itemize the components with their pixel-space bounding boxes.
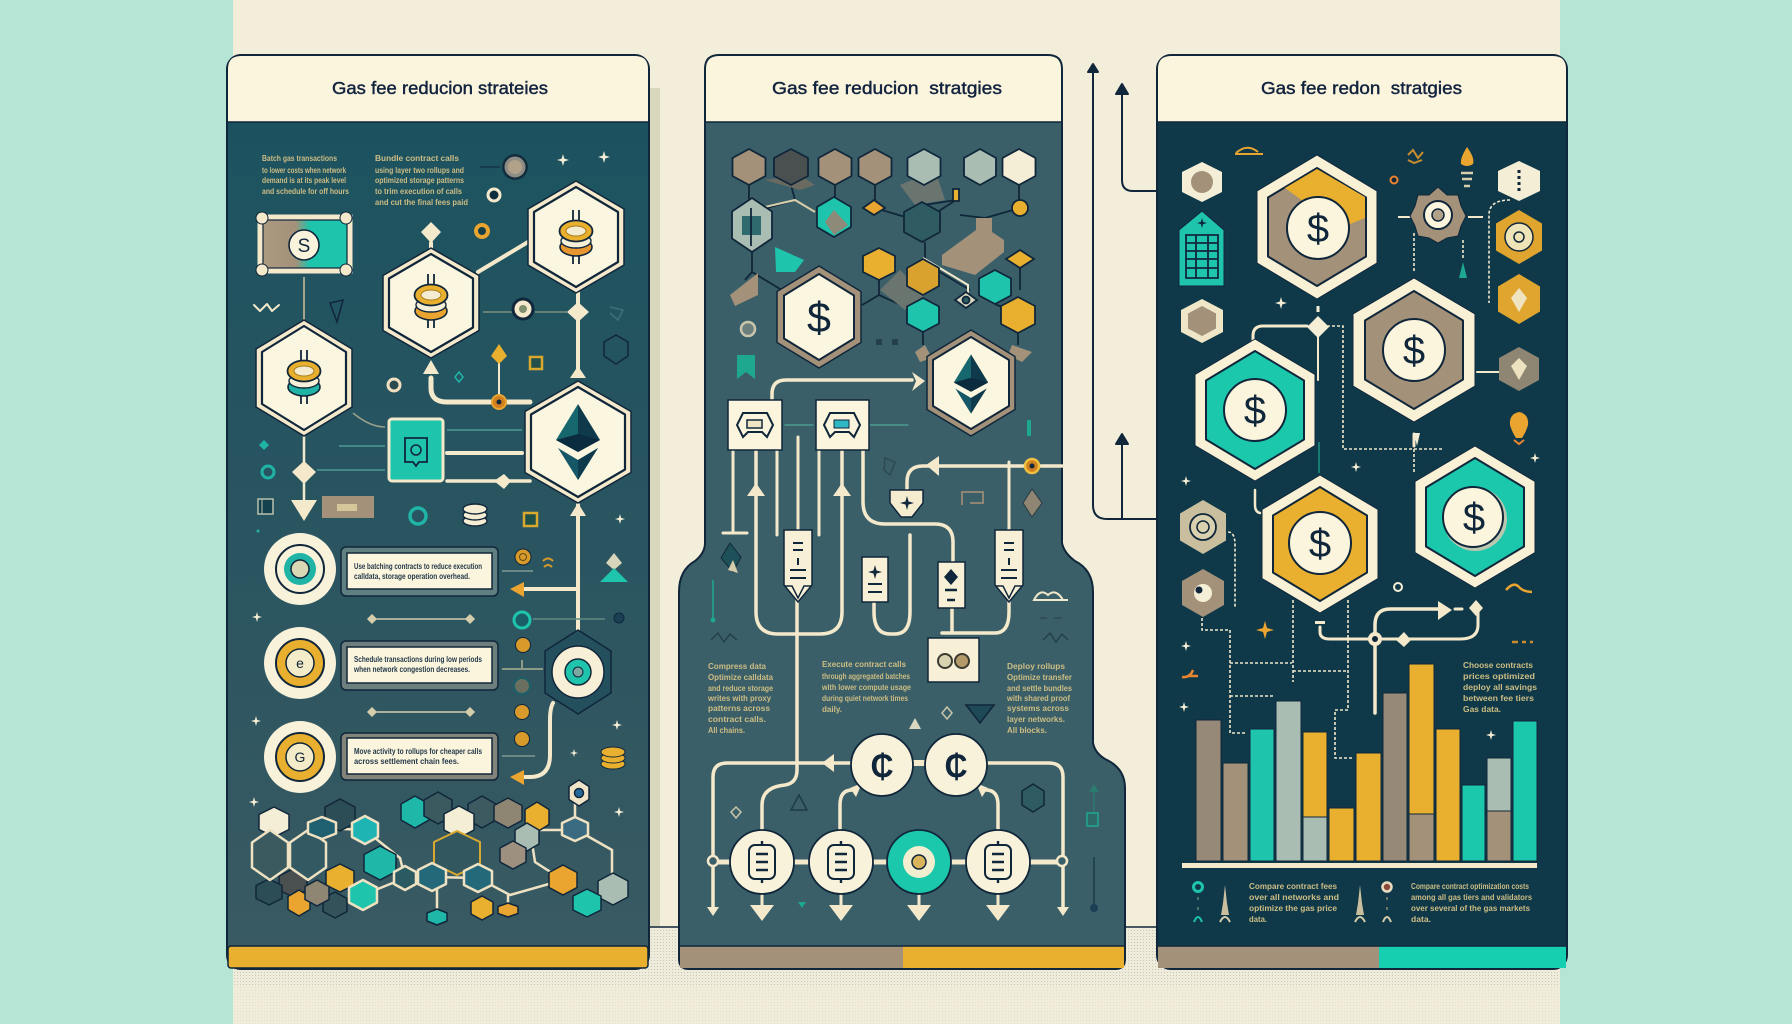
legend text right xyxy=(1411,882,1533,924)
panel 1 header xyxy=(228,56,648,122)
panel 1 intro text right: optimized storage patterns xyxy=(375,176,464,185)
legend text left: data. xyxy=(1249,915,1267,924)
line end nodes xyxy=(708,856,1067,866)
bar chart xyxy=(1196,664,1537,861)
legend text right: among all gas tiers and validators xyxy=(1411,893,1533,902)
hexagon: dollar taupe xyxy=(1353,278,1475,422)
panel 1 intro text left: Batch gas transactions xyxy=(262,154,337,163)
small hexagons left xyxy=(1180,162,1226,617)
icon: banknote xyxy=(256,212,352,276)
panel 2 text right: Deploy rollups xyxy=(1007,662,1066,671)
strategy text box 2: when network congestion decreases. xyxy=(353,664,470,674)
strategy text box 1: calldata, storage operation overhead. xyxy=(354,571,470,581)
strategy circle 3 xyxy=(264,721,336,793)
small icons panel 3 xyxy=(1179,147,1540,740)
node circle 4 xyxy=(966,830,1030,894)
strategy circle 3: G xyxy=(295,749,305,765)
panel 1 intro text right: to trim execution of calls xyxy=(375,187,463,196)
panel 2 text middle: through aggregated batches xyxy=(822,672,910,681)
panel 2 text middle: daily. xyxy=(822,705,842,714)
legend text right: Compare contract optimization costs xyxy=(1411,882,1529,891)
hexagon: coin stack left xyxy=(256,320,352,436)
hexagon: dollar teal xyxy=(1195,339,1315,481)
strategy text box 2 xyxy=(341,641,498,690)
strategy text box 3: Move activity to rollups for cheaper calls xyxy=(354,746,482,756)
small hexagons right xyxy=(1496,161,1542,391)
panel 2 text middle: with lower compute usage xyxy=(821,683,911,692)
panel 1 intro text right xyxy=(375,154,468,207)
panel 2 text right xyxy=(1006,662,1073,735)
hexagon: dollar xyxy=(777,266,861,368)
legend text right: over several of the gas markets xyxy=(1411,904,1531,913)
panel 2 text left: Optimize calldata xyxy=(708,673,774,682)
panel 1 footer bar xyxy=(228,946,648,968)
strategy text box 3 xyxy=(341,733,498,780)
panel 2 text left: and reduce storage xyxy=(708,684,773,693)
hexagon: coin stack middle xyxy=(383,248,479,358)
legend text left: over all networks and xyxy=(1249,893,1339,902)
panel 2 text middle xyxy=(821,660,911,714)
hexagon: dollar taupe and gold: $ xyxy=(1307,207,1329,251)
panel 2: flow diagram xyxy=(679,55,1125,969)
teal square node xyxy=(389,419,443,481)
hexagon network xyxy=(252,780,628,925)
hexagon: dollar taupe and gold xyxy=(1257,155,1377,299)
hexagon: dollar taupe: $ xyxy=(1403,329,1425,373)
arrowheads panel 1 xyxy=(291,360,586,521)
small icons panel 1 xyxy=(249,151,628,817)
strategy text box 1 xyxy=(341,547,498,596)
panel 1 header: Gas fee reducion strateies xyxy=(332,78,548,98)
legend icons xyxy=(1194,882,1392,922)
panel 2 text left: Compress data xyxy=(708,662,767,671)
panel 2 header: Gas fee reducion stratgies xyxy=(772,78,1002,98)
panel 1 intro text right: Bundle contract calls xyxy=(375,154,460,163)
coin box node xyxy=(928,638,979,682)
panel 1 intro text left xyxy=(262,154,349,196)
strategy text box 2: Schedule transactions during low periods xyxy=(354,654,482,664)
strategy text box 1: Use batching contracts to reduce execution xyxy=(354,561,482,571)
connectors panel 1 xyxy=(304,242,605,777)
node circle 2 xyxy=(809,830,873,894)
coin circle top right xyxy=(925,734,987,796)
panel 1 intro text left: and schedule for off hours xyxy=(262,187,349,196)
arrowheads panel 2 xyxy=(707,372,1069,921)
panel 1 intro text left: to lower costs when network xyxy=(262,166,346,175)
panel 2 footer bar xyxy=(680,946,1124,968)
divider arrow 1 xyxy=(368,615,474,623)
panel 3 text upper right: prices optimized xyxy=(1463,672,1535,681)
legend text left: optimize the gas price xyxy=(1249,904,1338,913)
panel 3 text upper right: Choose contracts xyxy=(1463,661,1534,670)
strategy circle 1 xyxy=(264,533,336,605)
panel 2 text left: patterns across xyxy=(708,704,771,713)
panel 1: coin and ethereum flow xyxy=(227,55,649,969)
bar chart baseline xyxy=(1182,863,1537,868)
dashed connectors xyxy=(1202,200,1510,758)
flow lines panel 2 xyxy=(713,380,1063,915)
connector lines between panels xyxy=(1088,64,1157,519)
panel 3: dollar hexes and bar chart xyxy=(1157,55,1567,969)
hexagon lattice xyxy=(730,149,1036,362)
panel 3 header: Gas fee redon stratgies xyxy=(1261,78,1462,98)
panel 2 text middle: during quiet network times xyxy=(822,694,908,703)
legend text left xyxy=(1249,882,1339,924)
panel 2 text left xyxy=(707,662,774,735)
panel 1 intro text left: demand is at its peak level xyxy=(262,176,346,185)
divider arrow 2 xyxy=(368,708,474,716)
strategy text box 3: across settlement chain fees. xyxy=(354,756,459,766)
panel 3 text upper right: Gas data. xyxy=(1463,705,1501,714)
panel 2 text right: and settle bundles xyxy=(1007,684,1073,693)
hexagon: dollar gold xyxy=(1262,475,1378,613)
panel 2 text right: with shared proof xyxy=(1006,694,1070,703)
panel 3 header xyxy=(1158,56,1566,122)
panel 2 text left: writes with proxy xyxy=(707,694,772,703)
icon: banknote: S xyxy=(298,236,310,257)
small icons panel 2 xyxy=(710,322,1099,912)
tall tag node left xyxy=(784,530,812,602)
panel 2 text left: All chains. xyxy=(708,726,745,735)
hexagon: dollar teal right xyxy=(1415,446,1535,588)
hexagon: dollar teal: $ xyxy=(1244,389,1266,433)
small tag node xyxy=(862,557,888,602)
panel 3 footer bar xyxy=(1158,946,1566,968)
hexagon: dollar gold: $ xyxy=(1309,522,1331,566)
box node 2 xyxy=(816,400,869,450)
coin circle top left xyxy=(851,734,913,796)
panel 2 text right: All blocks. xyxy=(1007,726,1047,735)
node circle 3 teal xyxy=(887,830,951,894)
hexagon: ethereum xyxy=(525,381,631,503)
gear node xyxy=(1410,187,1466,243)
panel 2 header xyxy=(706,56,1061,122)
bottom hexagon node xyxy=(545,630,611,714)
panel 2 text left: contract calls. xyxy=(708,715,766,724)
shield node xyxy=(890,490,923,517)
panel 1 intro text right: using layer two rollups and xyxy=(375,166,464,175)
panel 1 intro text right: and cut the final fees paid xyxy=(375,198,468,207)
strategy circle 2: e xyxy=(296,655,304,671)
panel 2 text right: systems across xyxy=(1007,704,1070,713)
panel 3 text upper right: deploy all savings xyxy=(1463,683,1538,692)
panel 3 text upper right xyxy=(1463,661,1538,714)
tall tag node right xyxy=(995,530,1023,602)
panel 2 text middle: Execute contract calls xyxy=(822,660,907,669)
small tag node middle xyxy=(938,562,965,608)
hexagon: dollar teal right: $ xyxy=(1463,496,1485,540)
hexagon: coin stack top right xyxy=(528,181,624,293)
coin circle top left: ₵ xyxy=(870,748,894,784)
icon: teal table tag xyxy=(1179,211,1224,286)
panel 2 text right: layer networks. xyxy=(1007,715,1065,724)
hexagon: ethereum panel 2 xyxy=(927,330,1015,436)
legend text right: data. xyxy=(1411,915,1431,924)
node circle 1 xyxy=(730,830,794,894)
hexagon: dollar: $ xyxy=(807,294,831,342)
panel 3 text upper right: between fee tiers xyxy=(1463,694,1535,703)
legend text left: Compare contract fees xyxy=(1249,882,1338,891)
box node 1 xyxy=(728,400,782,450)
panel 2 text right: Optimize transfer xyxy=(1007,673,1072,682)
strategy circle 2 xyxy=(264,627,336,699)
coin circle top right: ₵ xyxy=(944,748,968,784)
